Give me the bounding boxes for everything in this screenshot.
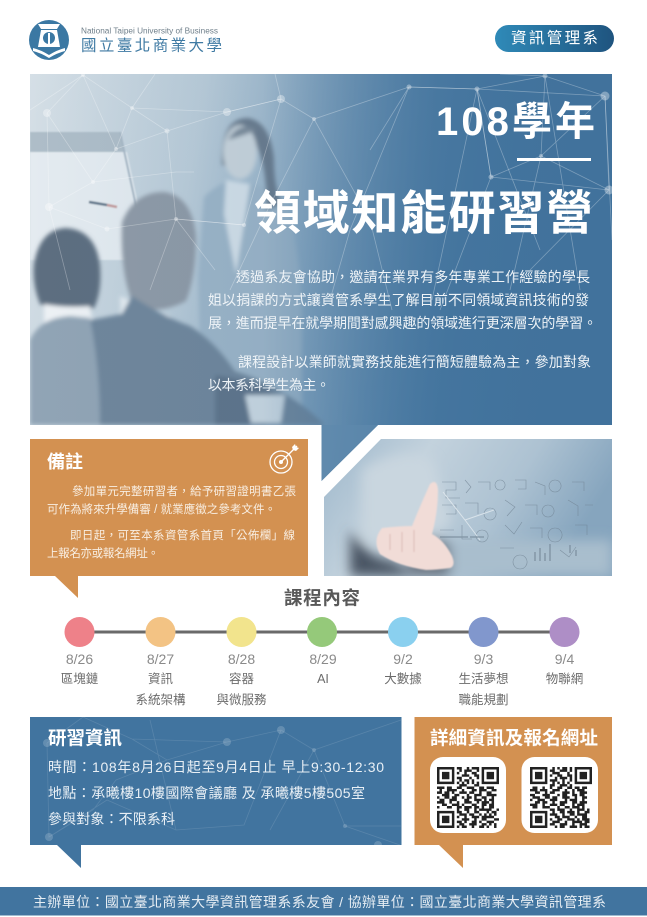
hero title rule [517, 158, 591, 161]
timeline item: 9/3 [458, 617, 509, 707]
hero intro text [208, 269, 597, 393]
hero intro text: 課程設計以業師就實務技能進行簡短體驗為主，參加對象 [238, 354, 591, 370]
notes heading: 備註 [47, 452, 83, 472]
info heading: 研習資訊 [48, 728, 122, 748]
hero intro text: 展，進而提早在就學期間對感興趣的領域進行更深層次的學習。 [208, 315, 597, 331]
heading: course content: 課程內容 [284, 588, 360, 608]
hero background [30, 74, 612, 481]
timeline item: 8/28: 與微服務 [216, 692, 267, 707]
notes text: 可作為將來升學備審 / 就業應徵之參考文件。 [47, 502, 276, 516]
timeline item: 8/28: 8/28 [228, 651, 255, 667]
info text: 地點：承曦樓10樓國際會議廳 及 承曦樓5樓505室 [48, 785, 365, 801]
timeline item: 9/3: 職能規劃 [458, 692, 509, 707]
header: university name: 國立臺北商業大學 [81, 36, 222, 54]
hero network nodes [43, 73, 614, 232]
footer band [0, 887, 647, 916]
hero intro text: 以本系科學生為主。 [208, 377, 330, 393]
hero title: camp name: 領域知能研習營 [254, 186, 593, 240]
header: university name [81, 26, 222, 54]
hero colour overlay [177, 74, 552, 481]
photo: hand pointing at diagrams [324, 439, 612, 576]
timeline item: 8/28 [216, 617, 267, 707]
timeline item: 9/2 [384, 617, 422, 686]
info text [48, 759, 384, 827]
timeline item: 8/29: 8/29 [309, 651, 337, 667]
QR code 2 [522, 757, 598, 833]
notes text [47, 484, 296, 560]
icon: target [270, 444, 299, 473]
hero intro text: 姐以捐課的方式讓資管系學生了解目前不同領域資訊技術的發 [208, 292, 589, 308]
timeline item: 8/26 [61, 617, 99, 686]
header: department badge [495, 25, 614, 52]
hero photo: presentation scene [30, 118, 325, 425]
timeline item: 8/28: 容器 [229, 671, 254, 686]
timeline [61, 617, 583, 707]
header: university logo [29, 20, 69, 60]
registration heading: 詳細資訊及報名網址 [430, 728, 598, 748]
panel: notes [30, 439, 308, 598]
panel: registration links [414, 717, 612, 868]
timeline item: 9/4: 物聯網 [546, 672, 583, 686]
timeline item: 9/4 [546, 617, 583, 686]
notes text: 參加單元完整研習者，給予研習證明書乙張 [72, 484, 296, 498]
header: university name: National Taipei University of Business [81, 26, 218, 36]
timeline item: 8/26: 8/26 [66, 651, 93, 667]
hero panel [30, 73, 614, 481]
timeline item: 8/26: 區塊鏈 [61, 671, 99, 686]
timeline item: 8/27: 資訊 [148, 671, 173, 686]
timeline item: 8/29 [307, 617, 337, 686]
hero title: academic year: 108學年 [436, 100, 595, 144]
notes text: 上報名亦或報名網址。 [47, 546, 159, 560]
timeline item: 8/27 [135, 617, 186, 707]
footer text: 主辦單位：國立臺北商業大學資訊管理系系友會 / 協辦單位：國立臺北商業大學資訊管理系 [33, 894, 606, 910]
info text: 時間：108年8月26日起至9月4日止 早上9:30-12:30 [48, 759, 384, 775]
timeline item: 9/2: 9/2 [393, 651, 413, 667]
timeline item: 9/2: 大數據 [384, 672, 422, 686]
timeline item: 8/27: 系統架構 [135, 693, 186, 707]
timeline item: 9/3: 9/3 [474, 651, 493, 667]
timeline item: 8/29: AI [317, 672, 329, 686]
timeline item: 9/4: 9/4 [555, 651, 574, 667]
timeline item: 8/27: 8/27 [147, 651, 174, 667]
info text: 參與對象：不限系科 [48, 811, 175, 827]
panel: workshop information [30, 717, 402, 868]
hero intro text: 透過系友會協助，邀請在業界有多年專業工作經驗的學長 [236, 269, 590, 285]
notes text: 即日起，可至本系資管系首頁「公佈欄」線 [70, 528, 296, 542]
hero network lines [30, 74, 612, 310]
info panel network pattern [43, 717, 401, 849]
header: department badge: 資訊管理系 [511, 28, 598, 47]
timeline item: 9/3: 生活夢想 [458, 671, 509, 686]
QR code 1 [430, 757, 506, 833]
